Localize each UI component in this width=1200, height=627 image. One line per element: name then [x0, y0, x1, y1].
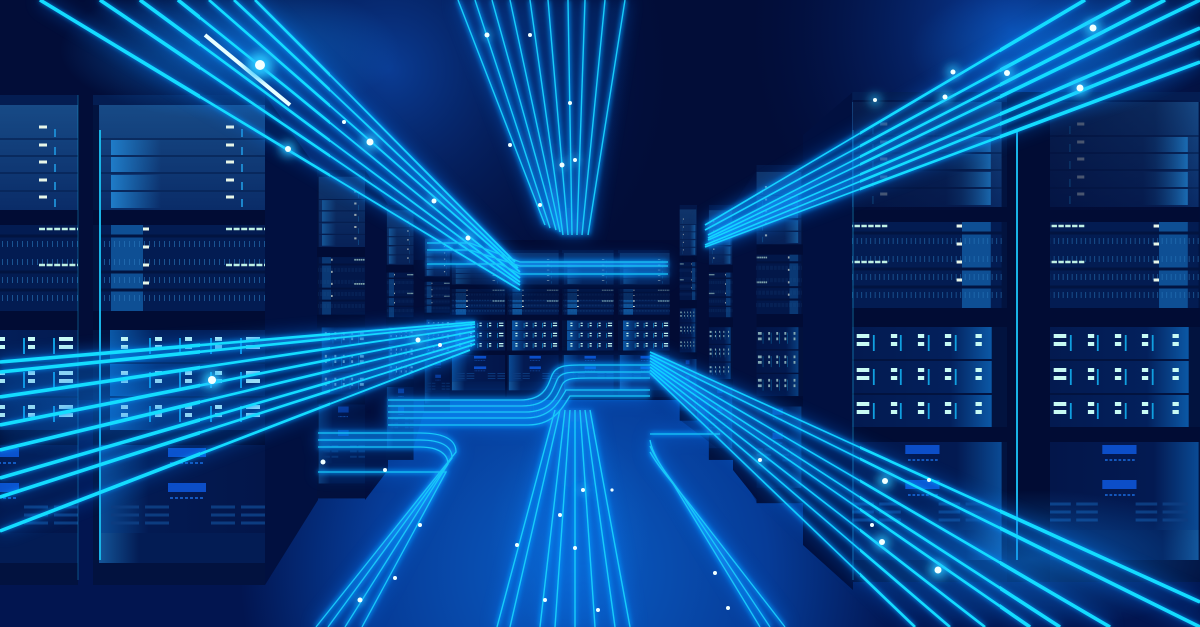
- left rack row: [0, 95, 450, 585]
- ceiling glow left: [0, 0, 700, 260]
- fiber bundle: top center: [458, 0, 625, 235]
- fiber bundle: curved floor runs: [316, 243, 785, 627]
- ceiling glow right: [700, 0, 1200, 260]
- rack deep left: [386, 205, 414, 460]
- right rack row: [680, 92, 1200, 590]
- rack deepest left: [424, 235, 450, 411]
- rack far right: [1049, 92, 1200, 582]
- rack mid left: [317, 170, 365, 498]
- light node halos: [203, 20, 1101, 604]
- fiber bundle: middle left: [0, 322, 475, 531]
- rack far left: [0, 95, 78, 585]
- rack near right: [852, 92, 1007, 582]
- rack deep right: [709, 205, 733, 460]
- rack side panel right: [803, 92, 853, 590]
- back wall racks: [440, 240, 680, 400]
- fiber bundle: top left: [40, 0, 520, 290]
- bright streak: [205, 35, 290, 105]
- rack side panel mid right: [733, 170, 757, 500]
- shade on right rack top panels: [853, 100, 1007, 210]
- rack side panel left: [265, 95, 318, 585]
- rack deepest right: [680, 205, 697, 421]
- rack near left: [93, 95, 265, 585]
- fiber bundle: top right: [705, 0, 1200, 247]
- fiber bundle: bottom center: [497, 410, 630, 627]
- rack side panel mid left: [365, 170, 388, 500]
- rack mid right: [757, 165, 803, 503]
- floor: [0, 400, 1200, 627]
- fiber bundle: bottom right: [650, 352, 1200, 627]
- light node cores: [208, 24, 1096, 612]
- rack edge lights: [78, 95, 1017, 580]
